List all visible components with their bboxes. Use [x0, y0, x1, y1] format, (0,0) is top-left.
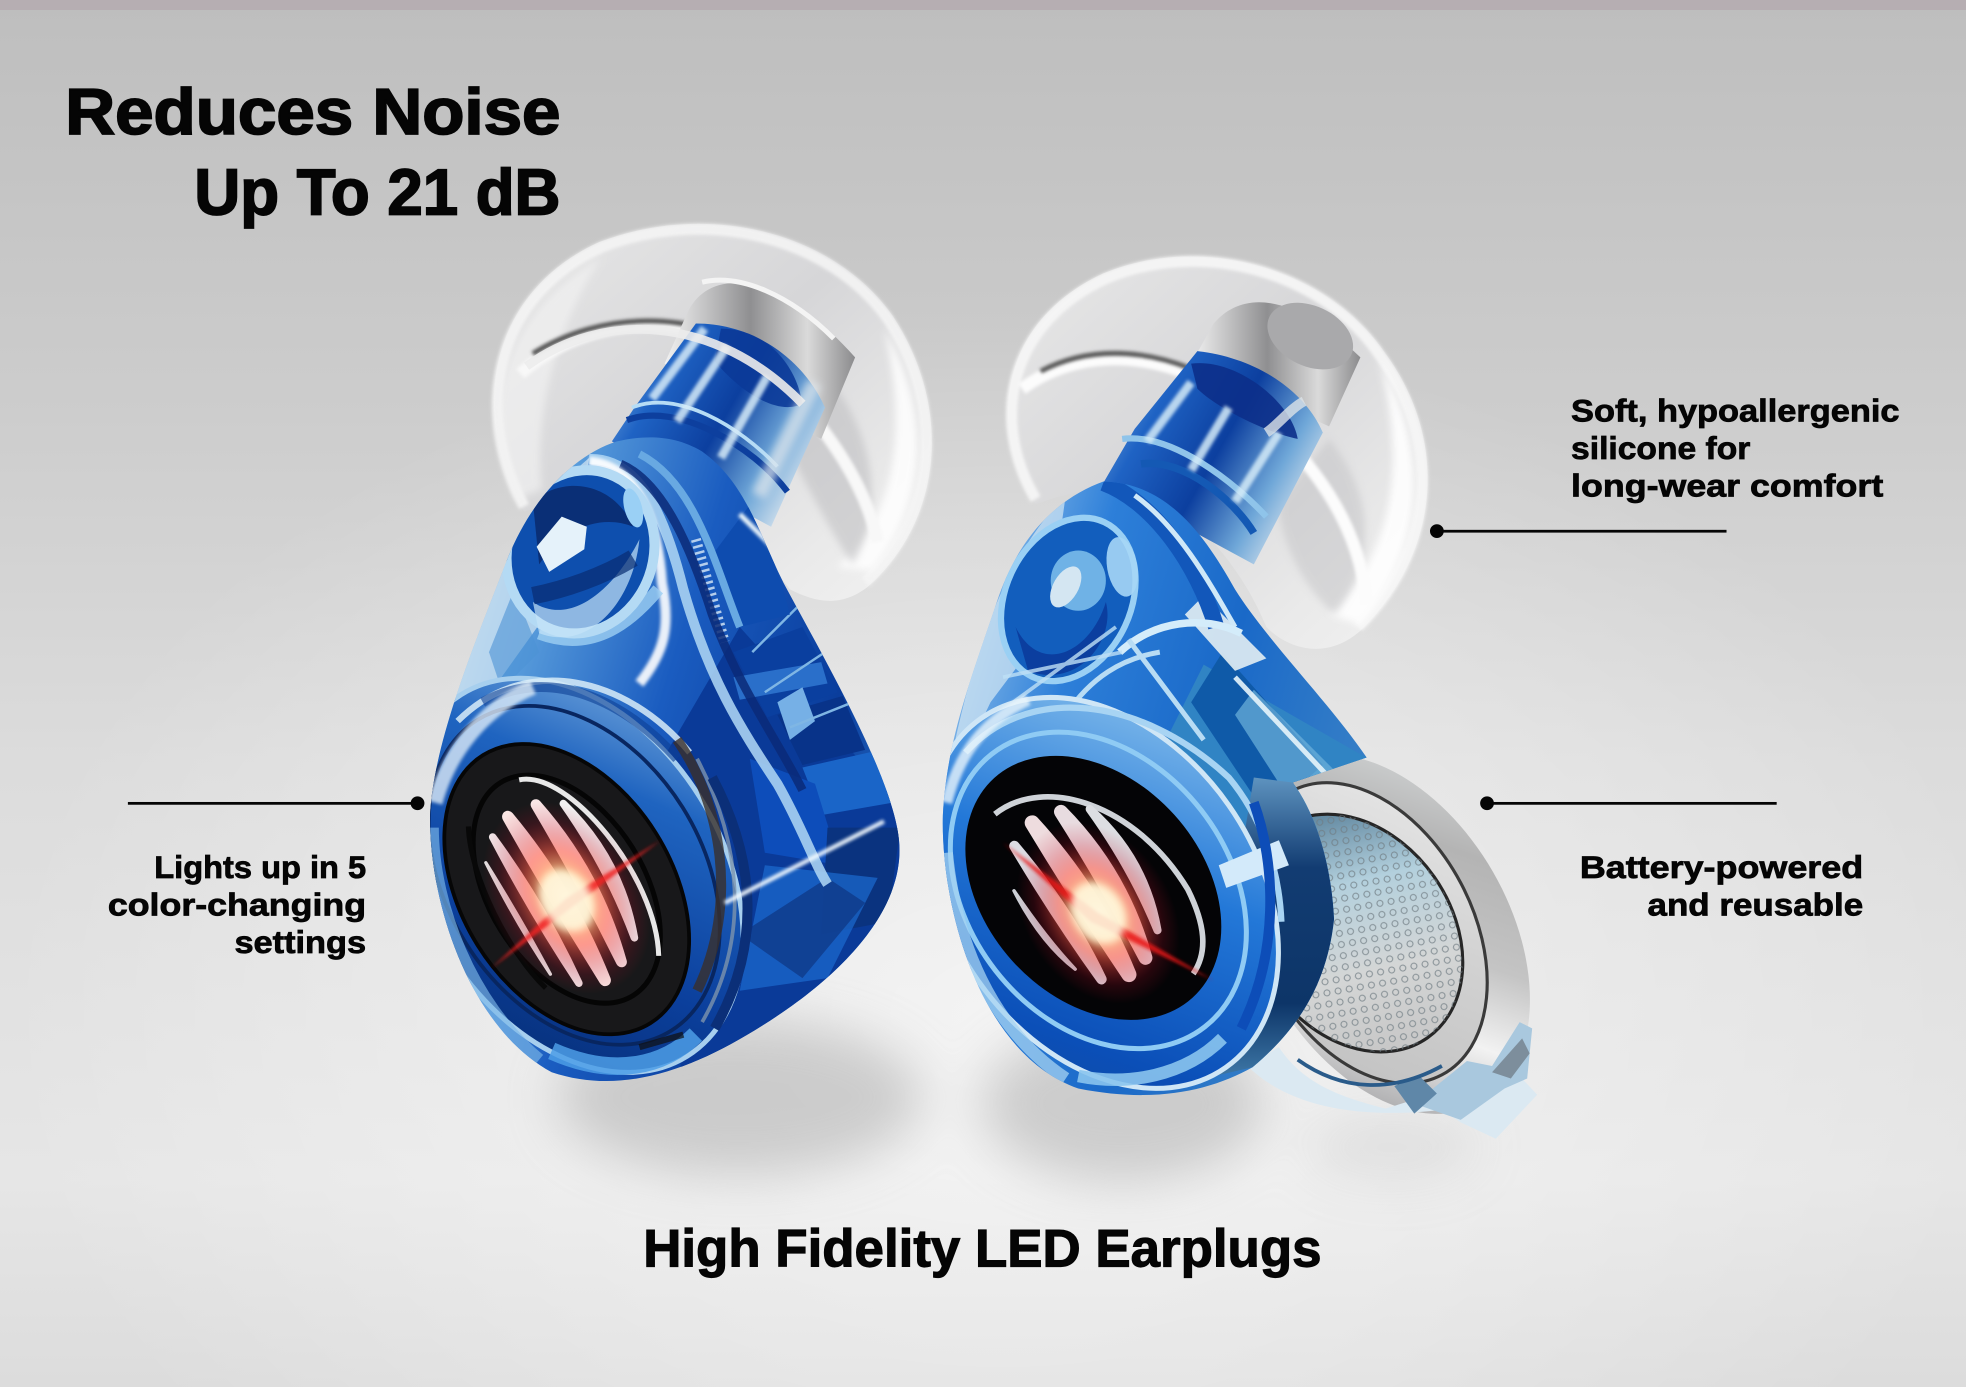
LED disc right [913, 705, 1273, 1071]
callout: silicone tip: long-wear comfort [1571, 469, 1884, 504]
LED disc left [394, 699, 740, 1079]
callout: silicone tip: Soft, hypoallergenic [1571, 393, 1900, 428]
callout: battery: Battery-powered [1580, 850, 1863, 885]
LED light slats right [970, 748, 1229, 1032]
callout: LED colors: color-changing [108, 887, 366, 922]
earplug right [942, 254, 1537, 1138]
callout: battery: and reusable [1648, 887, 1863, 922]
title: Up To 21 dB [194, 155, 560, 228]
transparent blue body right [942, 482, 1366, 1096]
transparent blue body left [430, 437, 900, 1081]
silicone ear tip right [1008, 256, 1428, 649]
dark perforated band around the cap [1218, 778, 1334, 1075]
stem left [527, 280, 855, 527]
callout: battery [1480, 796, 1863, 922]
product name heading: High Fidelity LED Earplugs [643, 1220, 1322, 1279]
callout: LED colors: Lights up in 5 [154, 850, 366, 885]
front rim [942, 694, 1281, 1091]
callout: silicone tip: silicone for [1571, 431, 1750, 466]
stem right [1103, 290, 1364, 564]
callout: LED colors: settings [234, 925, 366, 960]
LED glow right [983, 791, 1214, 1035]
window lobe [506, 465, 660, 638]
front rim [430, 676, 742, 1075]
callout: silicone tip [1430, 393, 1900, 538]
soft rim [497, 229, 926, 582]
battery cover right [1178, 703, 1590, 1165]
earplug left [430, 222, 933, 1081]
perforated mesh [1201, 772, 1508, 1094]
soft shadows under earplugs [558, 1020, 1480, 1183]
LED light slats left [434, 742, 699, 1037]
LED glow left [448, 771, 685, 1025]
window lobe [998, 514, 1139, 684]
light swoosh band [589, 459, 828, 884]
title: Reduces Noise [65, 75, 560, 148]
callout: LED colors [108, 796, 424, 960]
silicone ear tip left [494, 224, 932, 601]
title [65, 75, 560, 228]
hinge tab [1248, 1022, 1537, 1139]
